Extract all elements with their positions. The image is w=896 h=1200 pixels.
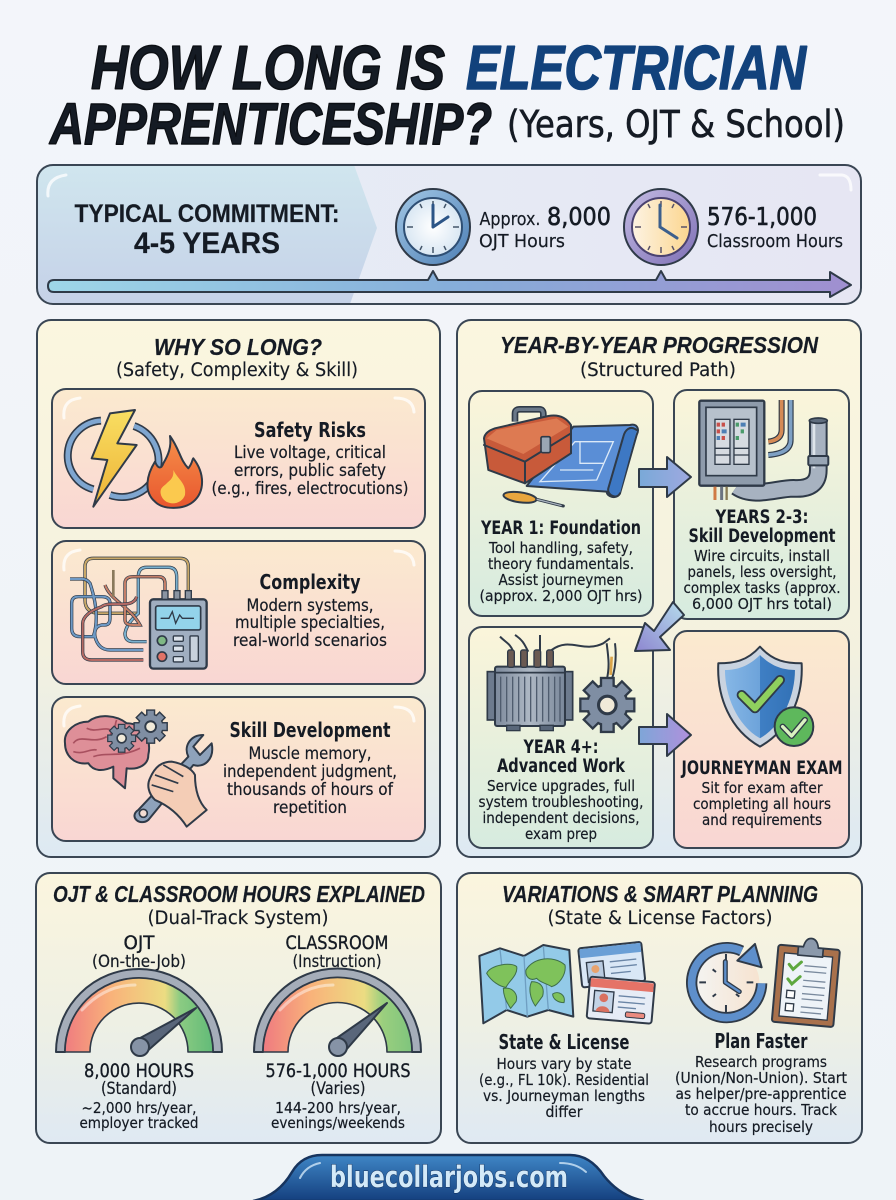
text: years 2-3: YEARS 2-3: <box>715 507 808 528</box>
text: year 1: Assist journeymen <box>498 571 624 589</box>
classroom values <box>266 1060 410 1132</box>
text: state and license: (e.g., FL 10k). Residential <box>479 1071 649 1089</box>
card: year 1 <box>469 391 653 616</box>
text: safety risks <box>212 418 408 498</box>
text: year 4+: system troubleshooting, <box>478 793 644 811</box>
text: years 2-3: panels, less oversight, <box>688 563 836 581</box>
OJT hours text: OJT Hours <box>479 231 565 252</box>
text: safety risks: Live voltage, critical <box>234 443 386 462</box>
text: complexity: real-world scenarios <box>233 631 387 650</box>
text: year 1: YEAR 1: Foundation <box>480 518 641 539</box>
text: state and license: State & License <box>498 1030 630 1054</box>
chart: OJT gauge <box>56 969 222 1056</box>
text: year 1: theory fundamentals. <box>488 555 634 573</box>
panel: typical commitment banner <box>37 165 861 304</box>
icon: clock and checklist <box>692 936 841 1027</box>
text: year 4+: YEAR 4+: <box>523 737 598 758</box>
text: plan faster: (Union/Non-Union). Start <box>675 1069 847 1087</box>
text: year 4+: independent decisions, <box>482 809 640 827</box>
OJT label: OJT <box>124 932 155 954</box>
text: skill development: thousands of hours of <box>227 780 394 799</box>
text: journeyman exam <box>680 758 842 829</box>
text: safety risks: errors, public safety <box>234 461 386 480</box>
title: ELECTRICIAN <box>466 34 807 103</box>
panel: variations and smart planning <box>457 873 862 1143</box>
icon: brain, gears and wrench <box>65 711 212 827</box>
OJT hours text: 8,000 <box>547 202 611 231</box>
icon: panel box and conduit <box>699 400 828 500</box>
OJT hours text: Approx. <box>480 209 540 230</box>
title: HOW LONG IS <box>91 34 445 103</box>
text: skill development: independent judgment, <box>223 762 397 781</box>
text: state and license <box>479 1030 649 1121</box>
heading: hours explained: (Dual-Track System) <box>148 908 328 929</box>
panel: OJT and classroom hours <box>36 873 441 1143</box>
text: year 4+: exam prep <box>525 825 597 843</box>
heading: why so long: (Safety, Complexity & Skill) <box>116 360 358 381</box>
text: skill development: repetition <box>273 798 347 817</box>
OJT values: (Standard) <box>101 1079 177 1098</box>
OJT label <box>92 932 186 971</box>
text: year 1: Tool handling, safety, <box>488 539 633 557</box>
title <box>48 34 845 157</box>
classroom values: evenings/weekends <box>271 1114 405 1132</box>
heading: year-by-year: YEAR-BY-YEAR PROGRESSION <box>500 332 818 358</box>
arrow: years 2-3 to year 4 <box>635 602 684 651</box>
text: years 2-3: Skill Development <box>688 526 836 547</box>
card: journeyman exam <box>674 631 849 848</box>
text: years 2-3: complex tasks (approx. <box>684 579 840 597</box>
text: skill development: Skill Development <box>230 718 391 742</box>
card: year 4+ <box>469 627 653 848</box>
heading: hours explained <box>53 881 425 929</box>
classroom label <box>286 932 388 971</box>
icon: OJT clock <box>396 189 470 265</box>
text: complexity: Complexity <box>260 570 360 594</box>
text: year 4+: Advanced Work <box>497 756 626 777</box>
icon: lightning and flame <box>68 410 202 508</box>
heading: hours explained: OJT & CLASSROOM HOURS EXPLAINED <box>53 881 425 907</box>
arrow: timeline <box>48 271 851 297</box>
text: state and license: differ <box>546 1103 583 1121</box>
text: years 2-3: Wire circuits, install <box>694 547 830 565</box>
footer: website banner <box>253 1155 644 1200</box>
text: skill development <box>223 718 397 817</box>
text: year 4+ <box>478 737 644 843</box>
icon: tangled wires and meter <box>70 558 207 669</box>
text: journeyman exam: Sit for exam after <box>702 779 823 797</box>
icon: classroom clock <box>624 189 698 265</box>
text: year 1: (approx. 2,000 OJT hrs) <box>480 587 642 605</box>
text: journeyman exam: and requirements <box>702 811 822 829</box>
OJT values: 8,000 HOURS <box>84 1060 194 1082</box>
text: plan faster: hours precisely <box>709 1118 813 1136</box>
icon: transformer and gear <box>487 635 633 731</box>
heading: why so long: WHY SO LONG? <box>154 334 322 360</box>
text: plan faster: to accrue hours. Track <box>685 1101 837 1119</box>
commitment text: 4-5 YEARS <box>134 227 280 260</box>
classroom values: (Varies) <box>310 1079 366 1098</box>
text: safety risks: (e.g., fires, electrocutions) <box>212 479 408 498</box>
classroom hours text <box>707 202 843 252</box>
heading: year-by-year <box>500 332 818 381</box>
text: plan faster: as helper/pre-apprentice <box>676 1085 846 1103</box>
card: complexity <box>52 541 425 684</box>
title: (Years, OJT & School) <box>507 103 845 146</box>
text: plan faster: Research programs <box>695 1053 827 1071</box>
title: APPRENTICESHIP? <box>48 92 492 157</box>
card: years 2-3 <box>674 390 849 619</box>
text: state and license: Hours vary by state <box>496 1055 632 1073</box>
text: journeyman exam: JOURNEYMAN EXAM <box>680 758 842 779</box>
text: years 2-3 <box>684 507 840 613</box>
panel: year-by-year progression <box>457 320 861 857</box>
card: skill development <box>52 697 425 841</box>
arrow: year 1 to years 2-3 <box>639 457 691 497</box>
text: complexity: multiple specialties, <box>235 613 385 632</box>
text: journeyman exam: completing all hours <box>693 795 831 813</box>
arrow: year 4 to exam <box>639 714 691 756</box>
classroom hours text: Classroom Hours <box>707 232 843 252</box>
icon: shield with checks <box>718 647 813 747</box>
OJT values: employer tracked <box>80 1114 198 1132</box>
classroom label: (Instruction) <box>292 952 382 971</box>
OJT hours text <box>479 202 611 252</box>
OJT label: (On-the-Job) <box>92 952 186 971</box>
panel: why so long <box>37 320 440 857</box>
heading: variations <box>502 881 818 929</box>
text: safety risks: Safety Risks <box>254 418 366 442</box>
icon: map and license cards <box>479 942 655 1024</box>
text: state and license: vs. Journeyman lengths <box>483 1087 645 1105</box>
classroom values: 144-200 hrs/year, <box>275 1099 401 1117</box>
footer: website banner: bluecollarjobs.com <box>330 1160 568 1194</box>
commitment text <box>74 200 340 260</box>
text: skill development: Muscle memory, <box>248 744 372 763</box>
classroom label: CLASSROOM <box>286 932 388 954</box>
text: year 1 <box>480 518 642 605</box>
text: plan faster <box>675 1029 847 1136</box>
classroom hours text: 576-1,000 <box>707 202 817 231</box>
heading: variations: VARIATIONS & SMART PLANNING <box>502 881 818 907</box>
classroom values: 576-1,000 HOURS <box>266 1060 410 1082</box>
heading: year-by-year: (Structured Path) <box>580 360 736 381</box>
card: safety risks <box>52 389 425 528</box>
icon: toolbox, blueprint, screwdriver <box>484 409 638 506</box>
text: years 2-3: 6,000 OJT hrs total) <box>692 595 832 613</box>
text: year 4+: Service upgrades, full <box>487 777 635 795</box>
commitment text: TYPICAL COMMITMENT: <box>74 200 340 228</box>
text: plan faster: Plan Faster <box>714 1029 808 1053</box>
chart: classroom gauge <box>254 968 421 1056</box>
heading: variations: (State & License Factors) <box>548 908 772 929</box>
text: complexity <box>233 570 387 650</box>
OJT values <box>80 1060 198 1132</box>
OJT values: ~2,000 hrs/year, <box>82 1099 196 1117</box>
text: complexity: Modern systems, <box>246 596 374 615</box>
heading: why so long <box>116 334 358 381</box>
